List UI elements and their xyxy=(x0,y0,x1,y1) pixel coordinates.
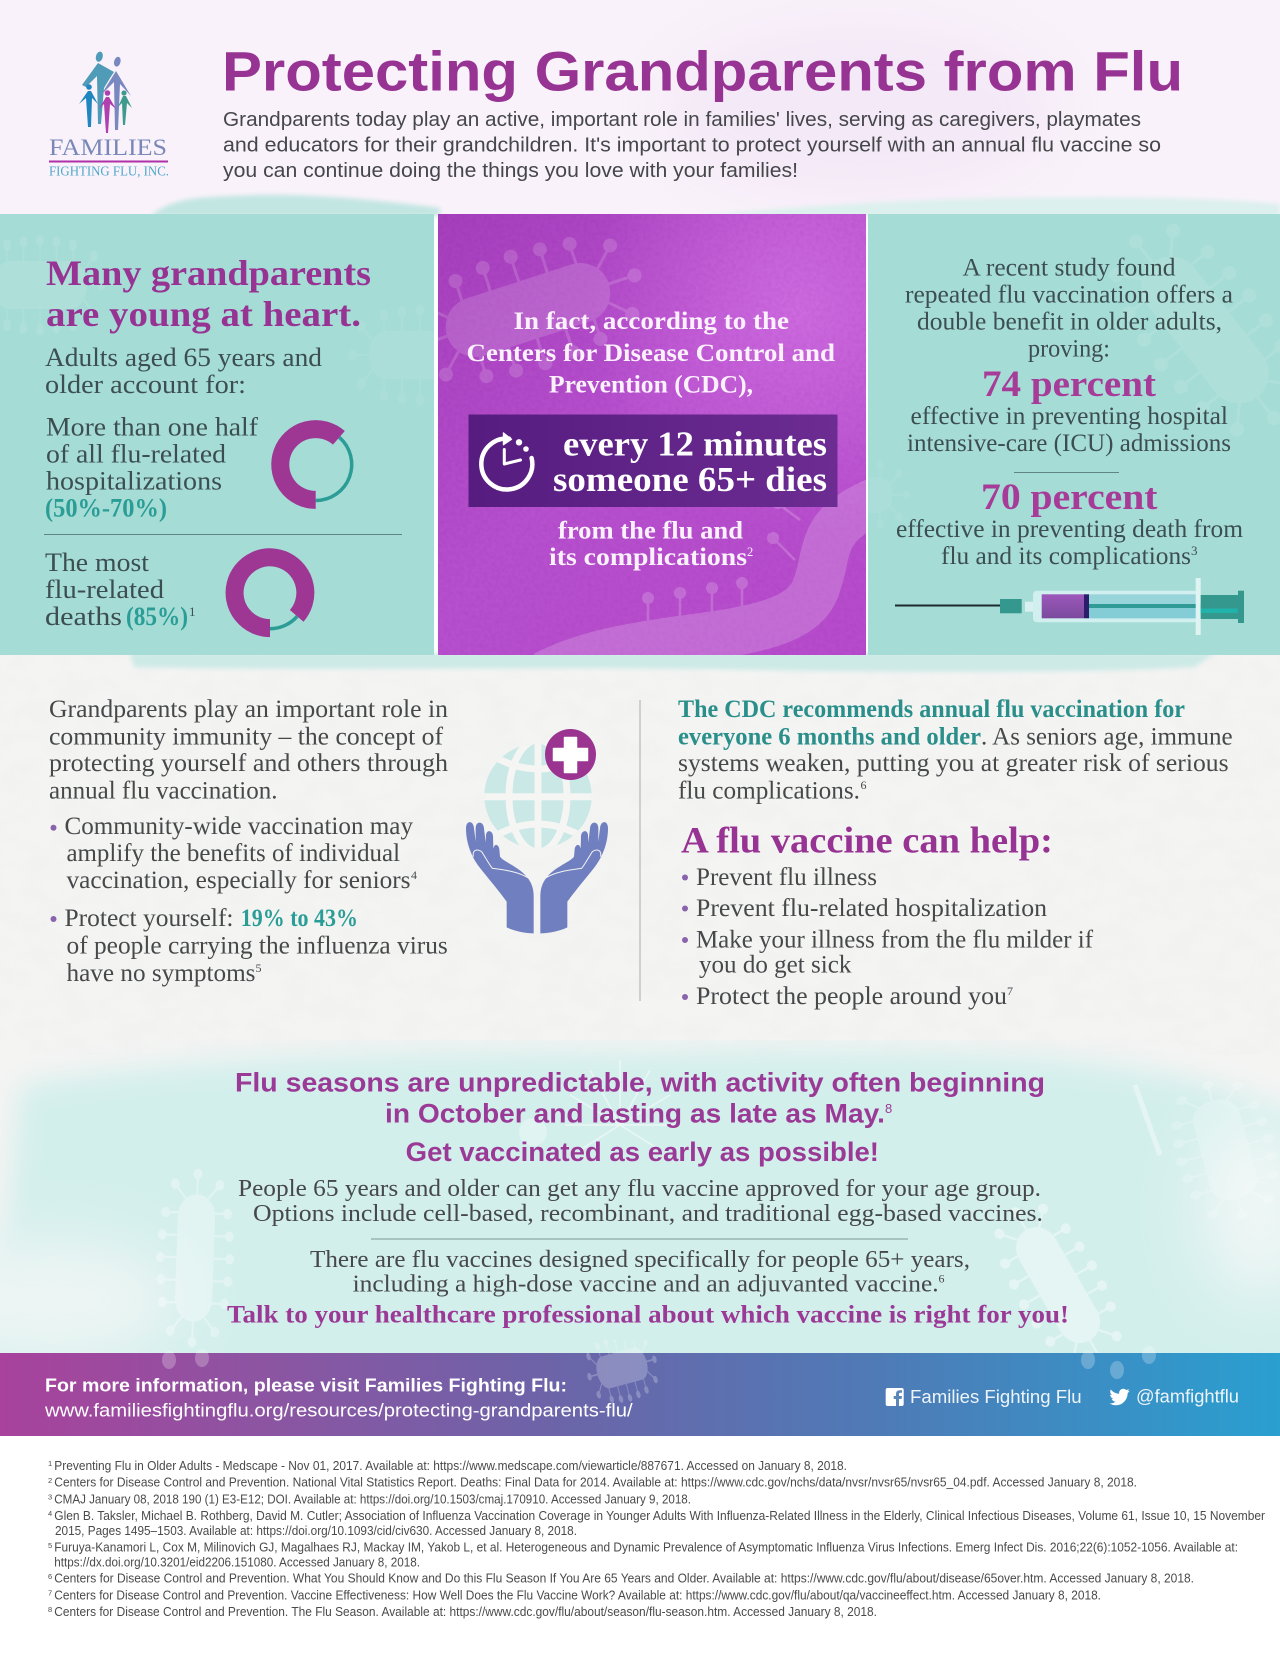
intro text: Grandparents play an important role in xyxy=(49,696,449,723)
stat: 70 percent: 70 percent xyxy=(981,477,1158,518)
closing text xyxy=(549,518,753,571)
heading: Many grandparents xyxy=(46,253,371,293)
icon: twitter xyxy=(1110,1389,1130,1405)
website text xyxy=(44,1376,634,1421)
intro text: older account for: xyxy=(45,370,246,399)
references: https://dx.doi.org/10.3201/eid2206.151080. Accessed January 8, 2018. xyxy=(54,1556,420,1570)
references: 2015, Pages 1495–1503. Available at: https://doi.org/10.1093/cid/civ630. Accessed January 8, 2018. xyxy=(55,1524,577,1538)
logo: Families Fighting Flu: FIGHTING FLU, INC. xyxy=(49,164,169,180)
references: Centers for Disease Control and Prevention. National Vital Statistics Report. Deaths: Final Data for 2014. Available at: https://www.cdc.gov/nchs/data/nvsr/nvsr65/nvsr65_04.pdf. Accessed January 8, 2018. xyxy=(54,1476,1137,1490)
bullet: protect yourself xyxy=(50,905,448,987)
hospitalizations stat: More than one half xyxy=(46,412,258,442)
references: 5 xyxy=(48,1541,52,1550)
references: 7 xyxy=(48,1588,52,1598)
intro text: Grandparents today play an active, important role in families' lives, serving as caregivers, playmates xyxy=(223,109,1141,131)
senior vaccines text: including a high-dose vaccine and an adjuvanted vaccine. xyxy=(353,1271,939,1298)
heading xyxy=(46,253,371,334)
senior vaccines text: 6 xyxy=(938,1272,944,1286)
stat: 70 percent xyxy=(896,477,1243,570)
headline: in October and lasting as late as May. xyxy=(385,1099,885,1129)
icon: stopwatch xyxy=(481,433,532,490)
closing text: 2 xyxy=(747,545,753,559)
intro text: you can continue doing the things you love with your families! xyxy=(223,160,798,182)
icon: hands holding globe xyxy=(466,729,608,933)
intro text: and educators for their grandchildren. It's important to protect yourself with an annual flu vaccine so xyxy=(223,134,1161,156)
closing text: its complications xyxy=(549,544,747,571)
references: 2 xyxy=(48,1476,52,1485)
recommendation text: systems weaken, putting you at greater risk of serious xyxy=(678,750,1229,777)
stat: 74 percent: effective in preventing hospital xyxy=(910,401,1228,430)
footer banner xyxy=(0,1340,1280,1436)
bullet: protect yourself: Protect yourself: xyxy=(64,905,234,932)
facebook label: Families Fighting Flu xyxy=(910,1386,1082,1407)
headline: Flu seasons are unpredictable, with activity often beginning xyxy=(235,1068,1045,1098)
closing text: from the flu and xyxy=(558,518,743,544)
benefits list: Prevent flu-related hospitalization xyxy=(696,895,1048,922)
deaths stat: flu-related xyxy=(45,575,164,604)
references: 3 xyxy=(48,1492,52,1502)
bullet: protect yourself: of people carrying the influenza virus xyxy=(66,933,448,960)
study text: proving: xyxy=(1028,334,1110,362)
donut chart: 50-70 percent xyxy=(280,429,352,500)
study text: repeated flu vaccination offers a xyxy=(905,280,1233,308)
hospitalizations stat: (50%-70%) xyxy=(45,494,167,522)
intro text xyxy=(45,343,322,399)
stat: 70 percent: 3 xyxy=(1191,543,1198,558)
lead text: Prevention (CDC), xyxy=(549,372,753,398)
benefits list: 7 xyxy=(1007,984,1013,998)
icon: facebook xyxy=(886,1388,904,1406)
stat: 74 percent: 74 percent xyxy=(982,364,1157,405)
intro text: annual flu vaccination. xyxy=(49,777,278,804)
intro text xyxy=(49,696,449,804)
bullet: protect yourself: 19% to 43% xyxy=(241,905,358,932)
lead text xyxy=(466,308,835,398)
stat: 74 percent: intensive-care (ICU) admissions xyxy=(907,428,1231,457)
references: Centers for Disease Control and Prevention. The Flu Season. Available at: https://www.cdc.gov/flu/about/season/flu-season.htm. Accessed January 8, 2018. xyxy=(54,1605,877,1619)
bullet: community-wide: vaccination, especially for seniors xyxy=(66,867,410,894)
bullet: protect yourself: 5 xyxy=(256,961,262,975)
headline: 8 xyxy=(885,1101,892,1116)
intro text: protecting yourself and others through xyxy=(49,750,449,777)
study text: A recent study found xyxy=(962,252,1176,282)
recommendation text: . As seniors age, immune xyxy=(981,723,1233,750)
panel: repeated vaccination xyxy=(868,214,1280,655)
benefits list: Prevent flu illness xyxy=(696,864,877,891)
references: Furuya-Kanamori L, Cox M, Milinovich GJ, Magalhaes RJ, Mackay IM, Yakob L, et al. Heterogeneous and Dynamic Prevalence of Asymptomatic Influenza Virus Infections. Emerg Infect Dis. 2016;22(6):1052-1056. Available at: xyxy=(54,1541,1238,1555)
recommendation text: everyone 6 months and older xyxy=(678,723,981,750)
statistic text xyxy=(553,425,827,499)
statistic text: someone 65+ dies xyxy=(553,460,827,499)
intro text xyxy=(223,109,1161,182)
study text xyxy=(905,252,1233,362)
logo: Families Fighting Flu: FAMILIES xyxy=(49,135,167,160)
deaths stat: (85%) xyxy=(126,602,188,631)
references: Preventing Flu in Older Adults - Medscape - Nov 01, 2017. Available at: https://www.medscape.com/viewarticle/887671. Accessed on January 8, 2018. xyxy=(54,1459,847,1473)
bullet: community-wide: 4 xyxy=(411,868,417,882)
benefits list: Make your illness from the flu milder if xyxy=(696,927,1094,954)
benefits list: Protect the people around you xyxy=(696,983,1008,1010)
callout: every 12 minutes xyxy=(468,414,838,507)
bullet: protect yourself: have no symptoms xyxy=(66,960,256,987)
bullet: community-wide: amplify the benefits of individual xyxy=(66,840,400,867)
panel: CDC statistic xyxy=(438,214,866,655)
bullet: community-wide xyxy=(50,813,417,894)
panel: vaccine recommendation xyxy=(678,696,1233,1010)
intro text: Adults aged 65 years and xyxy=(45,343,322,372)
website text: www.familiesfightingflu.org/resources/protecting-grandparents-flu/ xyxy=(44,1400,634,1421)
stat: 70 percent: flu and its complications xyxy=(941,541,1191,570)
stat: 70 percent: effective in preventing death from xyxy=(896,514,1243,543)
icon: syringe xyxy=(895,578,1244,635)
panel: flu seasons xyxy=(0,1040,1280,1353)
header xyxy=(49,40,1183,182)
lead text: In fact, according to the xyxy=(514,308,789,335)
title: Protecting Grandparents from Flu xyxy=(222,40,1183,102)
vaccine options text: People 65 years and older can get any flu vaccine approved for your age group. xyxy=(238,1175,1041,1202)
references: 6 xyxy=(48,1572,52,1581)
headline xyxy=(235,1068,1045,1167)
deaths stat xyxy=(45,548,196,631)
deaths stat: The most xyxy=(45,548,150,577)
twitter label: @famfightflu xyxy=(1136,1386,1239,1407)
donut chart: 85 percent xyxy=(235,557,305,629)
references xyxy=(48,1459,1265,1619)
recommendation text xyxy=(678,696,1233,804)
lead text: Centers for Disease Control and xyxy=(466,340,835,367)
references: Centers for Disease Control and Prevention. What You Should Know and Do this Flu Season If You Are 65 Years and Older. Available at: https://www.cdc.gov/flu/about/disease/65over.htm. Accessed January 8, 2018. xyxy=(54,1572,1194,1586)
vaccine options text xyxy=(238,1175,1043,1227)
headline: Get vaccinated as early as possible! xyxy=(406,1137,879,1167)
hospitalizations stat xyxy=(45,412,258,522)
recommendation text: flu complications. xyxy=(678,777,860,804)
references: CMAJ January 08, 2018 190 (1) E3-E12; DOI. Available at: https://doi.org/10.1503/cmaj.170910. Accessed January 9, 2018. xyxy=(54,1492,691,1506)
hospitalizations stat: hospitalizations xyxy=(46,466,222,496)
logo: Families Fighting Flu xyxy=(49,51,169,180)
recommendation text: 6 xyxy=(860,778,866,792)
deaths stat: deaths xyxy=(45,602,122,631)
vaccine options text: Options include cell-based, recombinant, and traditional egg-based vaccines. xyxy=(253,1200,1043,1227)
benefits list: you do get sick xyxy=(699,952,852,979)
panel: community immunity xyxy=(49,696,608,987)
study text: double benefit in older adults, xyxy=(917,306,1222,336)
recommendation text: The CDC recommends annual flu vaccination for xyxy=(678,696,1185,723)
website text: For more information, please visit Families Fighting Flu: xyxy=(45,1376,567,1396)
call to action: Talk to your healthcare professional about which vaccine is right for you! xyxy=(227,1300,1069,1329)
references: 1 xyxy=(48,1459,52,1468)
hospitalizations stat: of all flu-related xyxy=(46,440,226,468)
heading: are young at heart. xyxy=(46,294,361,334)
references: Centers for Disease Control and Prevention. Vaccine Effectiveness: How Well Does the Flu Vaccine Work? Available at: https://www.cdc.gov/flu/about/qa/vaccineeffect.htm. Accessed January 8, 2018. xyxy=(54,1588,1101,1602)
references: 8 xyxy=(48,1605,52,1614)
heading: A flu vaccine can help: xyxy=(681,821,1053,862)
references: 4 xyxy=(48,1509,52,1518)
statistic text: every 12 minutes xyxy=(563,425,827,464)
benefits list xyxy=(682,864,1094,1010)
senior vaccines text xyxy=(310,1246,970,1298)
senior vaccines text: There are flu vaccines designed specifically for people 65+ years, xyxy=(310,1246,970,1273)
deaths stat: 1 xyxy=(189,604,196,619)
panel: young at heart xyxy=(0,214,434,655)
stat: 74 percent xyxy=(907,364,1231,457)
intro text: community immunity – the concept of xyxy=(49,723,444,750)
bullet: community-wide: Community-wide vaccination may xyxy=(64,813,413,840)
